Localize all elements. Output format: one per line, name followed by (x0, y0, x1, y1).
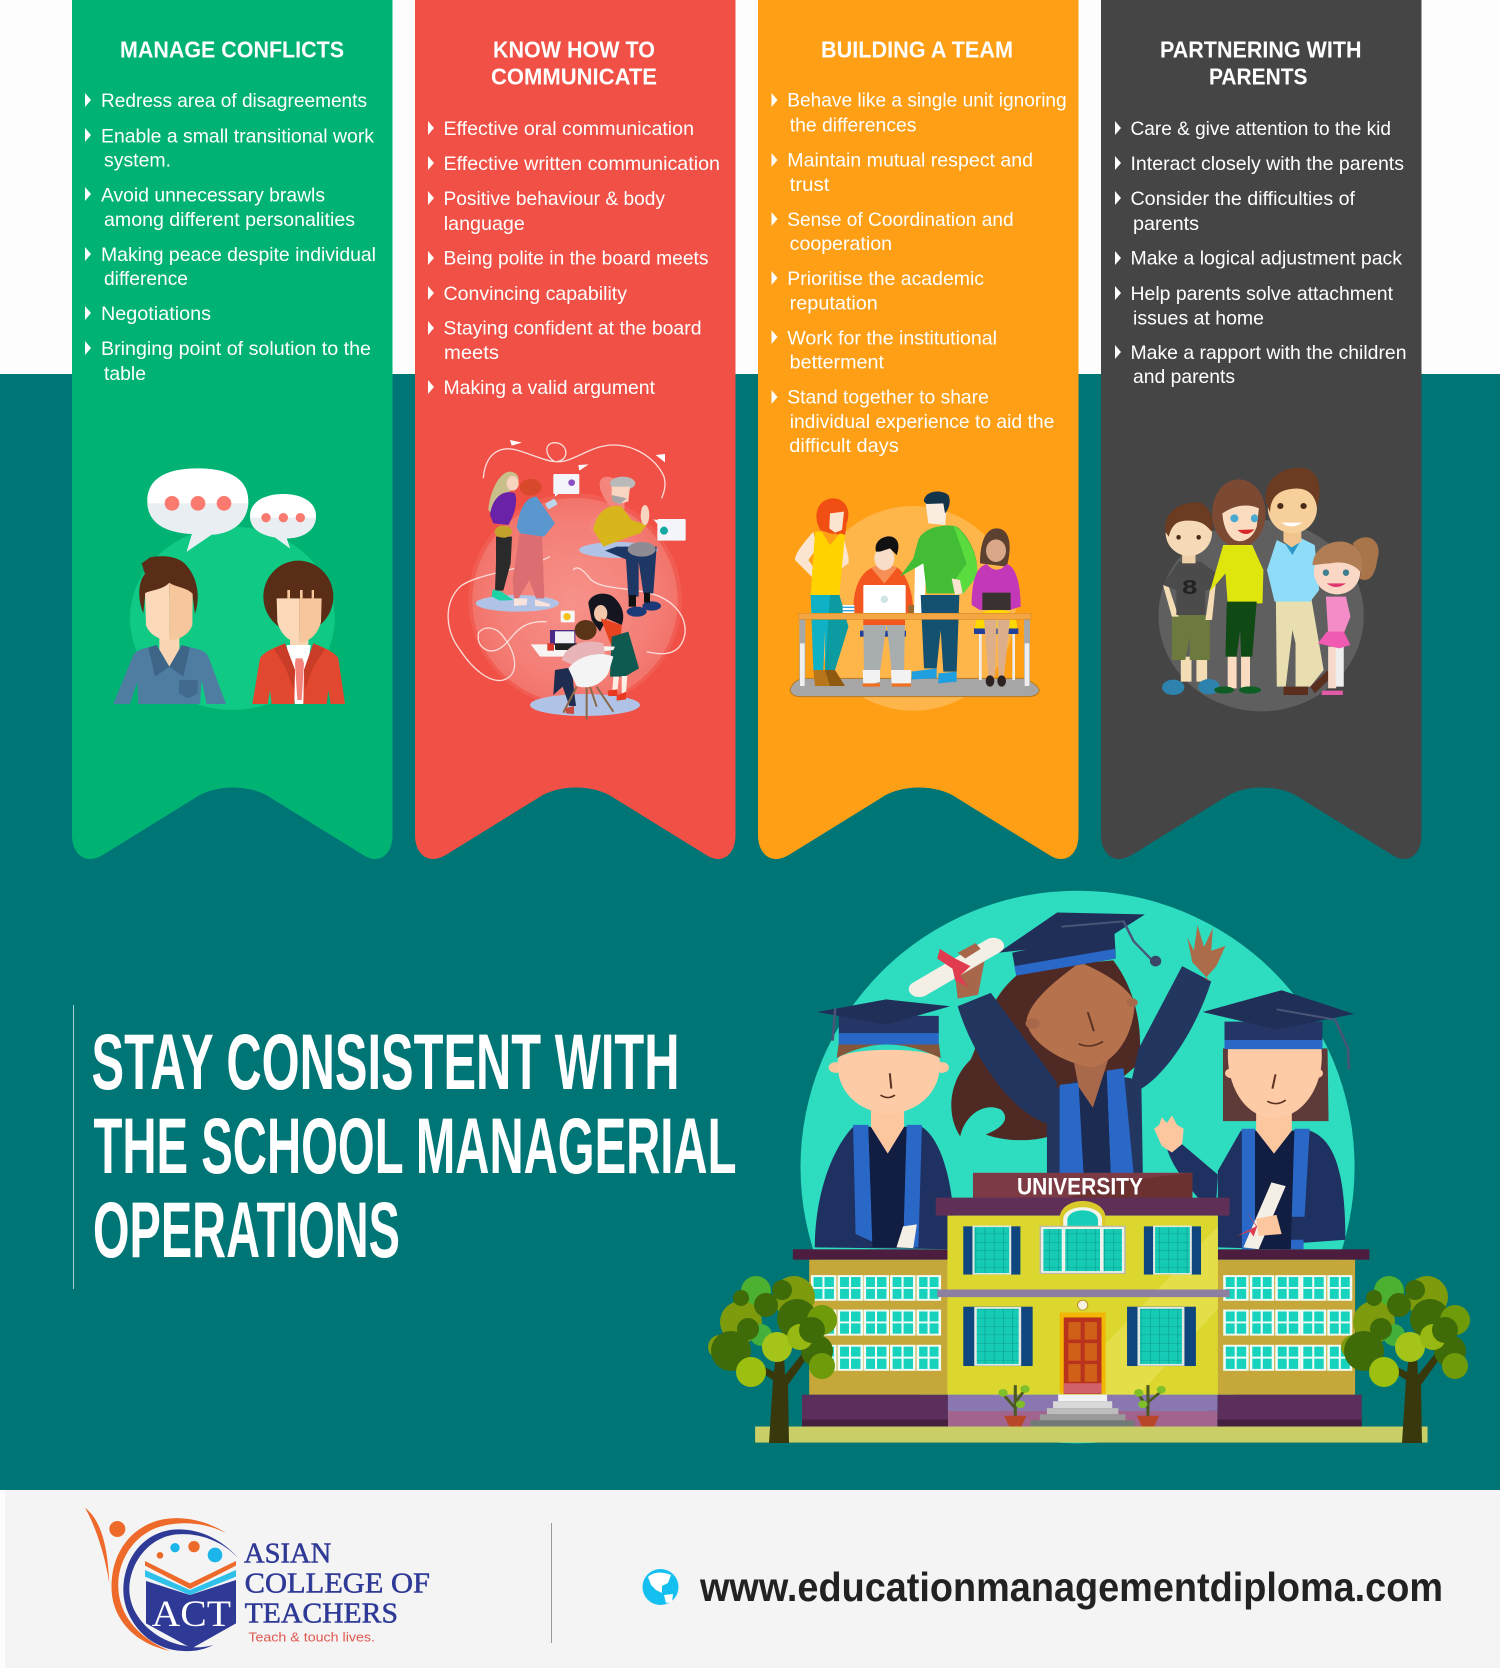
list: communication skills: language (444, 213, 525, 235)
woman (252, 561, 345, 704)
list: partnering tips: Make a rapport with the children (1130, 342, 1406, 364)
list: team building: trust (790, 174, 830, 196)
icon: globe (642, 1569, 678, 1605)
heading: know how to communicate (491, 36, 657, 90)
list: partnering tips: issues at home (1133, 308, 1264, 330)
list: manage conflicts: difference (104, 268, 188, 290)
university building (755, 1173, 1428, 1443)
illustration: team around a table (790, 492, 1039, 711)
red-haired woman (513, 479, 558, 607)
list: manage conflicts: system. (104, 150, 171, 172)
list: manage conflicts: Bringing point of solution to the (101, 338, 371, 360)
panel: know how to communicate (415, 0, 736, 859)
logo: Asian College of Teachers: ASIAN (244, 1539, 331, 1570)
list: team building: betterment (790, 352, 885, 374)
man (113, 556, 226, 704)
tree: right (1341, 1276, 1470, 1443)
list: team building: Work for the institutional (787, 327, 997, 349)
footer (0, 1490, 1500, 1668)
woman at laptop (531, 620, 615, 719)
list: partnering tips: Care & give attention to the kid (1130, 118, 1391, 140)
list: team building: individual experience to aid the (790, 411, 1054, 433)
list: manage conflicts: Avoid unnecessary brawls (101, 184, 325, 206)
illustration: two people talking (113, 468, 345, 710)
title block: STAY CONSISTENT WITH (92, 1017, 680, 1106)
man in green (900, 492, 977, 683)
mom (1210, 479, 1266, 694)
backdrop ellipse (801, 891, 1355, 1443)
panel: manage conflicts (72, 0, 392, 859)
list: team building (772, 90, 1067, 457)
illustration: family (1158, 468, 1379, 711)
girl (1313, 537, 1379, 695)
logo: Asian College of Teachers: TEACHERS (245, 1598, 398, 1629)
list: communication skills: Convincing capability (444, 283, 627, 305)
list: team building: Stand together to share (787, 387, 989, 409)
list: team building: reputation (790, 293, 878, 315)
title block: THE SCHOOL MANAGERIAL (94, 1101, 736, 1190)
left graduate (815, 999, 955, 1249)
heading: partnering with parents (1160, 36, 1362, 90)
list: manage conflicts: among different personalities (104, 209, 355, 231)
list: team building: Sense of Coordination and (787, 209, 1014, 231)
heading: manage conflicts: MANAGE CONFLICTS (120, 36, 344, 62)
list: team building: cooperation (790, 233, 892, 255)
boy: 8 (1182, 576, 1197, 599)
list: partnering tips: Make a logical adjustment pack (1130, 248, 1402, 270)
list: manage conflicts: table (104, 363, 146, 385)
divider (551, 1523, 552, 1643)
dad (1265, 468, 1330, 695)
centre graduate (919, 913, 1226, 1175)
list: partnering tips: and parents (1133, 366, 1235, 388)
seated man (593, 477, 661, 617)
title block (73, 1005, 736, 1289)
list: partnering tips: Consider the difficulties of (1130, 188, 1356, 210)
man with laptop (843, 536, 918, 687)
logo: Asian College of Teachers: Teach & touch lives. (248, 1630, 375, 1645)
list: communication skills: Staying confident at the board (444, 318, 702, 340)
logo: Asian College of Teachers: COLLEGE OF (245, 1569, 430, 1600)
heading: know how to communicate: KNOW HOW TO (493, 36, 655, 62)
list: manage conflicts (85, 90, 376, 385)
heading: building a team: BUILDING A TEAM (821, 36, 1013, 62)
list: manage conflicts: Enable a small transitional work (101, 126, 374, 148)
illustration: people communicating (448, 440, 686, 719)
list: manage conflicts: Making peace despite individual (101, 244, 376, 266)
list: team building: Behave like a single unit ignoring (787, 90, 1067, 112)
title block: OPERATIONS (93, 1185, 400, 1274)
sign text: university: UNIVERSITY (1017, 1174, 1143, 1200)
logo: Asian College of Teachers: ACT (152, 1593, 231, 1634)
list: communication skills (428, 118, 720, 399)
heading: know how to communicate: COMMUNICATE (491, 64, 657, 90)
list: communication skills: Making a valid argument (444, 377, 656, 399)
heading: partnering with parents: PARENTS (1209, 64, 1308, 90)
illustration: graduates and university (708, 891, 1470, 1443)
list: partnering tips: Interact closely with the parents (1130, 153, 1404, 175)
list: team building: Maintain mutual respect and (787, 150, 1033, 172)
list: team building: the differences (790, 114, 917, 136)
woman in green skirt (588, 594, 639, 701)
tree: left (708, 1276, 837, 1443)
website url: www.educationmanagementdiploma.com (699, 1564, 1443, 1610)
right graduate (1154, 990, 1354, 1249)
list: manage conflicts: Negotiations (101, 303, 211, 325)
list: communication skills: Effective written communication (444, 153, 720, 175)
list: team building: Prioritise the academic (787, 268, 984, 290)
list: team building: difficult days (789, 435, 899, 457)
woman in yellow (795, 498, 849, 686)
table (798, 613, 1031, 686)
list: communication skills: Being polite in the board meets (444, 248, 709, 270)
boy (1162, 502, 1220, 695)
list: communication skills: Positive behaviour & body (444, 188, 665, 210)
panel: partnering with parents (1101, 0, 1422, 859)
list: manage conflicts: Redress area of disagreements (101, 90, 367, 112)
blonde woman (488, 472, 519, 601)
woman with tablet (972, 528, 1021, 687)
list: communication skills: Effective oral communication (444, 118, 694, 140)
list: partnering tips (1115, 118, 1406, 388)
panel: building a team (758, 0, 1078, 859)
list: partnering tips: Help parents solve attachment (1130, 283, 1394, 305)
list: communication skills: meets (444, 342, 499, 364)
list: partnering tips: parents (1133, 213, 1199, 235)
heading: partnering with parents: PARTNERING WITH (1160, 36, 1362, 62)
logo: Asian College of Teachers (85, 1508, 430, 1651)
platform (790, 678, 1039, 697)
